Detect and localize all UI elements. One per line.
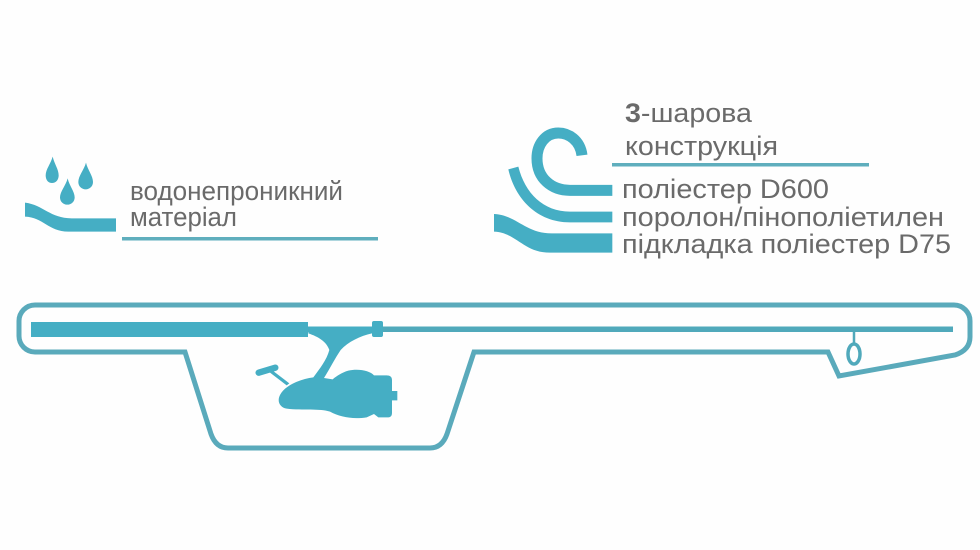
- icon: three layers: [494, 133, 612, 253]
- rod case outline: [19, 305, 970, 448]
- layer list: підкладка поліестер D75: [622, 229, 951, 259]
- underline: 3-layer construction: [612, 163, 869, 166]
- rod ring: [372, 321, 383, 337]
- layer list: поролон/пінополіетилен: [622, 202, 944, 232]
- icon: spinning reel: [259, 327, 397, 418]
- rod handle: [31, 322, 308, 337]
- text: waterproof material: водонепроникний: [130, 176, 343, 206]
- rod guide: [848, 332, 860, 364]
- icon: water drops on material: [25, 157, 116, 232]
- text: waterproof material: матеріал: [130, 202, 237, 232]
- heading: 3-layer construction: [625, 98, 778, 161]
- fishing rod: [31, 321, 953, 337]
- underline: waterproof material: [122, 237, 378, 240]
- layer list: поліестер D600: [622, 174, 829, 204]
- layer list: [622, 174, 951, 259]
- text: waterproof material: [130, 176, 343, 232]
- heading: 3-layer construction: конструкція: [625, 131, 778, 161]
- rod blank: [308, 326, 953, 332]
- heading: 3-layer construction: 3-шарова: [625, 98, 753, 128]
